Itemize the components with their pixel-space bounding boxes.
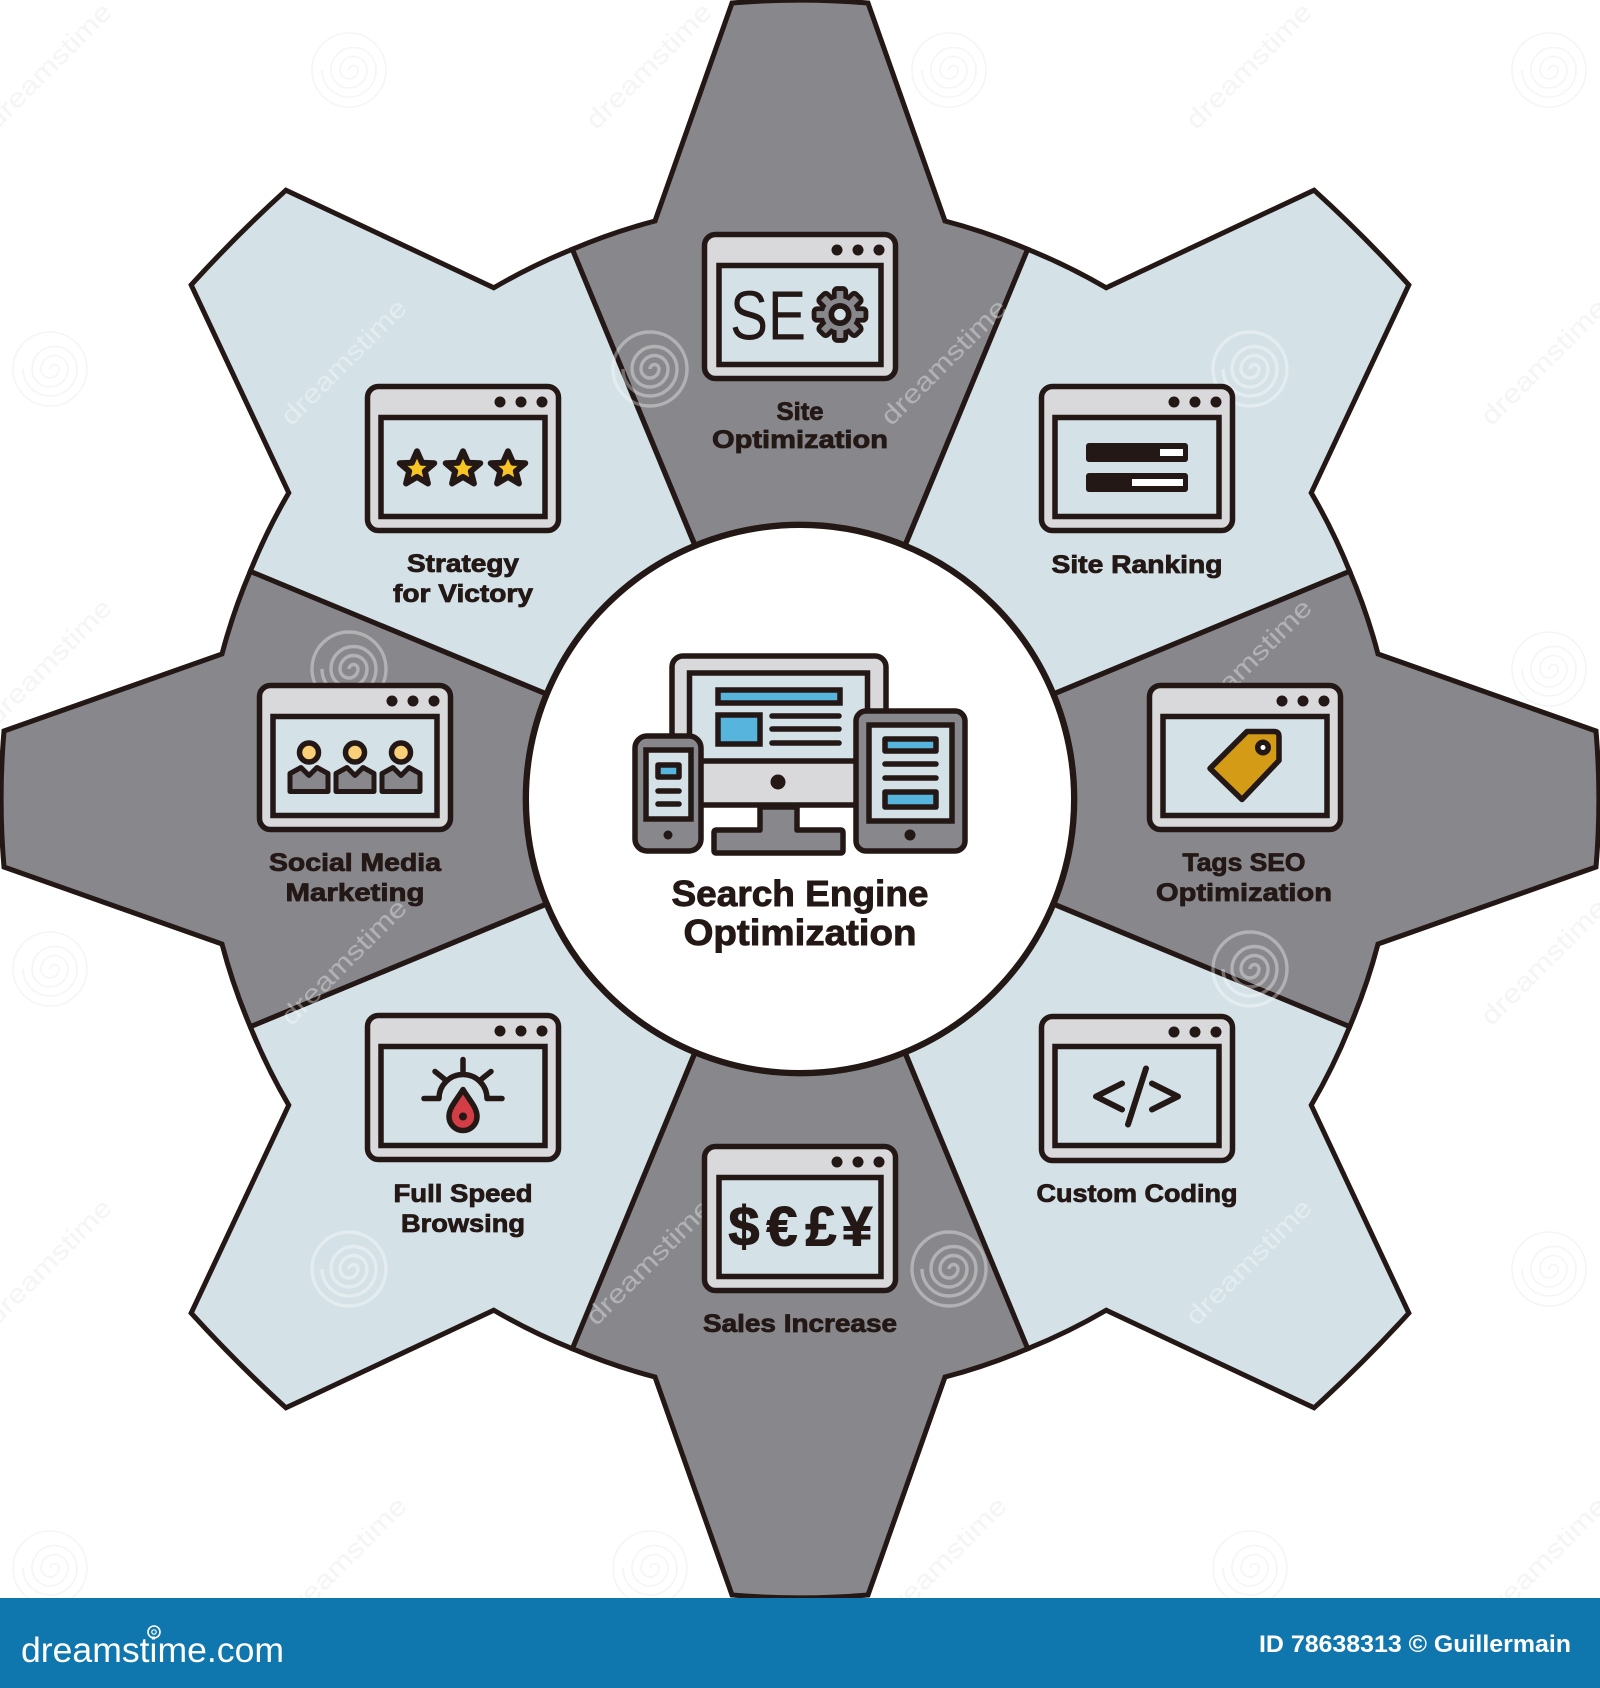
footer bar [0,1598,1600,1688]
gear segment: right tooth, dark [1054,571,1599,1027]
gear segment: upper left tooth, light [76,75,781,780]
icon: SEO window [704,234,896,378]
label: Sales Increase: Sales Increase [703,1310,897,1338]
gear segment: top tooth, dark [572,0,1028,545]
label: Tags SEO Optimization: Tags SEO [1182,849,1306,877]
label: Site Optimization [712,398,888,454]
footer logo: dreamstime.com: dreamstime.com [21,1631,284,1670]
icon: currency window [704,1146,896,1290]
label: Strategy for Victory: Strategy [407,550,519,578]
footer credit: ID 78638313 © Guillermain [1259,1631,1571,1658]
center title: Search Engine [672,873,928,914]
icon: site ranking window [1042,386,1232,530]
gear segment: upper right tooth, light [819,75,1524,780]
label: Site Optimization: Optimization [712,426,888,454]
icon: devices (monitor, phone, tablet) [635,656,965,853]
center title: Optimization [684,912,916,953]
label: Full Speed Browsing: Browsing [401,1210,525,1238]
label: Full Speed Browsing: Full Speed [394,1180,532,1208]
phone [635,736,701,851]
label: Social Media Marketing [269,849,442,907]
label: Tags SEO Optimization [1156,849,1332,907]
label: Strategy for Victory: for Victory [393,580,533,608]
central white circle [526,526,1074,1072]
label: Strategy for Victory [393,550,533,608]
icon: SEO window: SE [730,276,806,354]
gear segment: bottom tooth, dark [572,1053,1028,1598]
gear segment: lower left tooth, light [76,818,781,1523]
icon: social media window [260,686,450,830]
icon: custom coding window [1042,1016,1232,1160]
icon: tags SEO window [1150,686,1340,830]
gear segment: lower right tooth, light [819,818,1524,1523]
icon: currency window: $€£¥ [728,1194,873,1258]
gear segment: left tooth, dark [1,571,546,1027]
label: Social Media Marketing: Social Media [269,849,442,877]
monitor [672,656,886,853]
label: Full Speed Browsing [394,1180,532,1238]
label: Custom Coding: Custom Coding [1036,1180,1238,1208]
tablet [856,711,965,851]
label: Site Ranking: Site Ranking [1052,551,1222,579]
center title [672,873,928,953]
icon: strategy stars window [368,386,558,530]
label: Social Media Marketing: Marketing [286,879,424,907]
label: Site Optimization: Site [776,398,824,426]
icon: full speed window [368,1016,558,1160]
label: Tags SEO Optimization: Optimization [1156,879,1332,907]
